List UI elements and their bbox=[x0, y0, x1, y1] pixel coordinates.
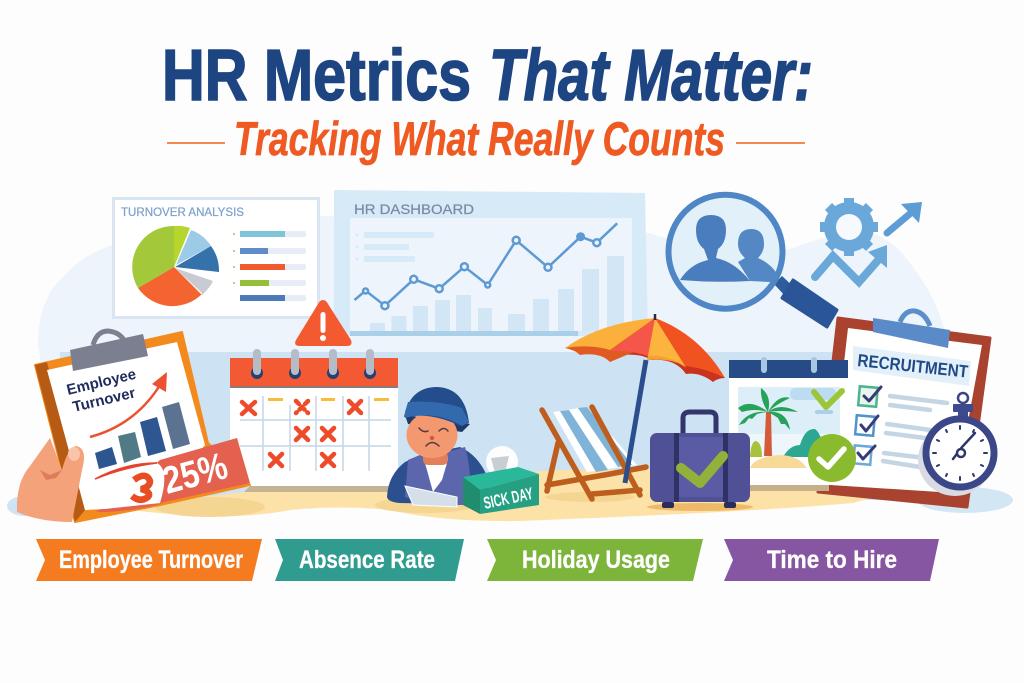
bar chart bbox=[370, 256, 624, 331]
subtitle: Tracking What Really Counts bbox=[234, 112, 725, 165]
icon: magnifying glass with people bbox=[668, 195, 837, 327]
ribbon: holiday usage bbox=[487, 539, 703, 581]
suitcase check mark bbox=[681, 456, 723, 483]
clipboard clip bbox=[873, 311, 950, 348]
title bbox=[162, 36, 813, 116]
suitcase bbox=[650, 412, 750, 508]
people silhouettes bbox=[680, 215, 779, 282]
calendar with absences bbox=[230, 349, 398, 492]
icon: warning triangle bbox=[295, 300, 352, 346]
calendar grid bbox=[240, 396, 391, 471]
holiday calendar bbox=[729, 357, 848, 491]
clipboard heading: Turnover bbox=[71, 384, 137, 416]
pie chart bbox=[132, 226, 219, 306]
clipboard heading: Employee bbox=[65, 366, 138, 399]
tissue box: sick day: SICK DAY bbox=[482, 484, 535, 513]
right ground shadow bbox=[917, 487, 1013, 513]
ribbon: absence rate bbox=[275, 539, 464, 581]
calendar rings bbox=[251, 349, 376, 379]
25 percent banner: 25% bbox=[158, 445, 232, 503]
ribbon: holiday usage: Holiday Usage bbox=[522, 546, 670, 574]
clipboard heading bbox=[65, 366, 138, 416]
ribbon: employee turnover: Employee Turnover bbox=[59, 546, 243, 574]
jacket bbox=[387, 447, 487, 505]
title: That Matter: bbox=[489, 36, 813, 116]
beach sand bbox=[130, 470, 900, 521]
title: HR Metrics bbox=[162, 36, 471, 116]
heading: HR dashboard: HR DASHBOARD bbox=[354, 201, 474, 217]
25 percent banner bbox=[78, 438, 250, 512]
paper bbox=[405, 486, 457, 507]
legend bars bbox=[233, 231, 306, 301]
ribbon: employee turnover bbox=[36, 539, 262, 581]
panel: turnover analysis bbox=[114, 198, 318, 318]
beach picture bbox=[738, 387, 842, 485]
panel: HR dashboard bbox=[334, 190, 648, 336]
clipboard bars bbox=[95, 402, 190, 469]
icon: gear bbox=[820, 198, 878, 256]
face bbox=[406, 412, 458, 458]
beach umbrella bbox=[565, 314, 725, 483]
background water band bbox=[60, 352, 950, 500]
green check badge bbox=[808, 434, 856, 482]
heading: turnover analysis: TURNOVER ANALYSIS bbox=[121, 207, 244, 219]
clipboard clip bbox=[70, 331, 148, 371]
trend arrow bbox=[90, 372, 167, 437]
employee turnover clipboard bbox=[35, 331, 250, 522]
ribbon: time to hire bbox=[724, 539, 939, 581]
deck chair bbox=[542, 407, 646, 499]
absence marks bbox=[242, 401, 361, 466]
beanie bbox=[404, 387, 469, 426]
ribbon: absence rate: Absence Rate bbox=[299, 546, 435, 574]
sand shadows bbox=[155, 492, 753, 517]
ribbon: time to hire: Time to Hire bbox=[767, 546, 897, 574]
sick person bbox=[387, 387, 487, 507]
checklist bbox=[853, 386, 947, 467]
hand holding clipboard bbox=[7, 438, 84, 522]
line chart bbox=[354, 223, 617, 309]
heading: recruitment: RECRUITMENT bbox=[857, 350, 969, 382]
icon: growth arrows bbox=[815, 202, 922, 282]
hair bbox=[405, 415, 470, 432]
stopwatch bbox=[918, 393, 994, 496]
background hill bbox=[38, 216, 950, 500]
recruitment clipboard bbox=[818, 311, 990, 507]
text placeholders bbox=[356, 232, 434, 262]
tissue box: sick day bbox=[463, 446, 539, 514]
